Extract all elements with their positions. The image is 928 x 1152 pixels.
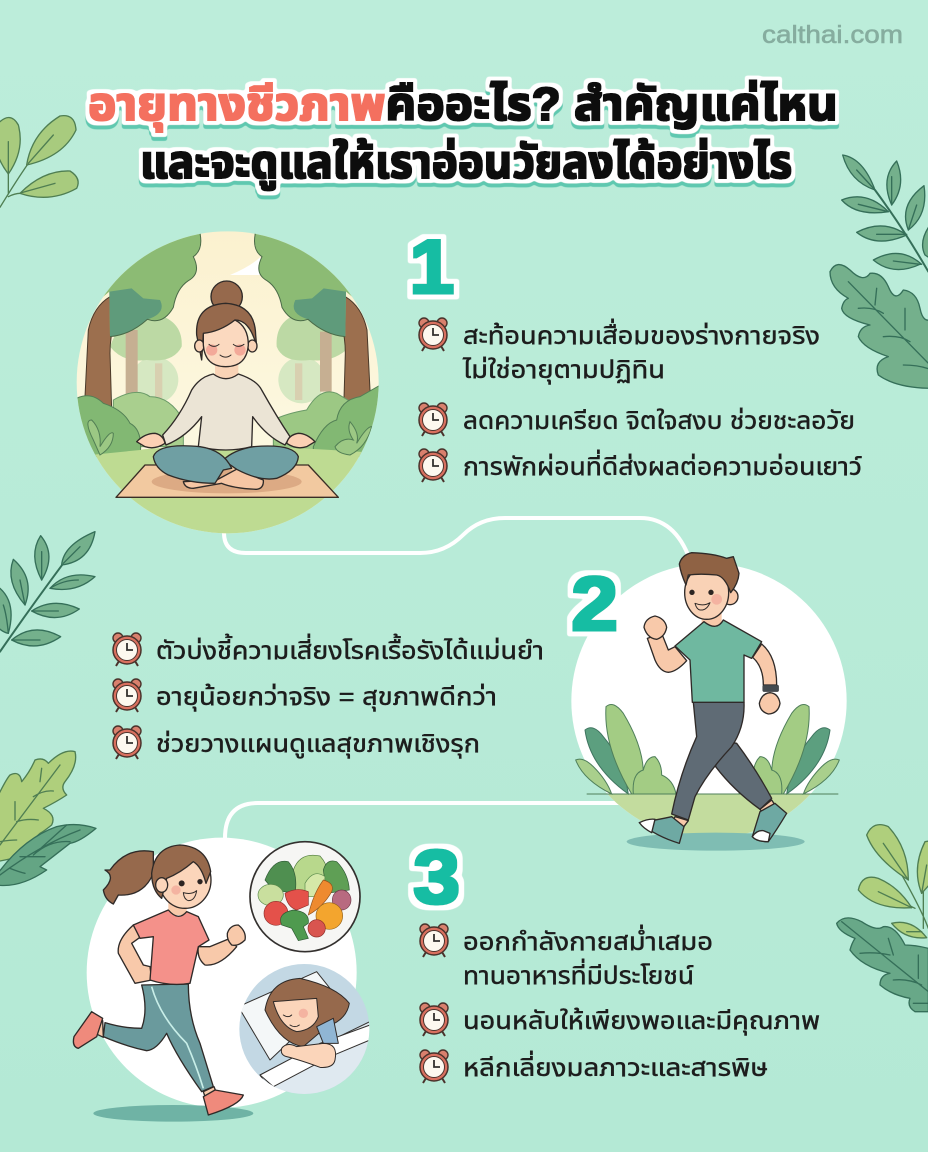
title: และจะดูแลให้เราอ่อนวัยลงได้อย่างไร	[140, 136, 792, 190]
runner	[73, 845, 245, 1115]
bullets: step 3	[420, 924, 820, 1083]
bullets: step 2: ช่วยวางแผนดูแลสุขภาพเชิงรุก	[156, 730, 480, 759]
leaves: lower left oak leaves	[0, 751, 96, 886]
leaves: lower right branch and oak leaf	[837, 825, 928, 1012]
title	[88, 78, 838, 190]
connector: step 1 to step 2	[224, 518, 690, 560]
food plate	[250, 842, 360, 952]
illustration: meditating woman	[67, 227, 389, 540]
number 2: 2	[571, 562, 618, 647]
bullets: step 1: การพักผ่อนที่ดีส่งผลต่อความอ่อนเยาว์	[463, 449, 862, 481]
illustration: walking man	[571, 553, 847, 861]
number 1: 1	[409, 224, 455, 309]
leaves: middle left branch	[0, 532, 95, 652]
bullets: step 1: ลดความเครียด จิตใจสงบ ช่วยชะลอวัย	[463, 407, 855, 435]
bullets: step 3: ออกกำลังกายสม่ำเสมอ	[463, 924, 713, 956]
bullets: step 2: ตัวบ่งชี้ความเสี่ยงโรคเรื้อรังได้แม่นยำ	[156, 633, 544, 665]
title: อายุทางชีวภาพ คืออะไร? สำคัญแค่ไหน	[88, 78, 838, 132]
bullets: step 2	[113, 633, 544, 759]
number 3: 3	[413, 835, 460, 920]
bullets: step 3: นอนหลับให้เพียงพอและมีคุณภาพ	[463, 1007, 820, 1036]
bullets: step 1	[419, 318, 862, 482]
bullets: step 2: อายุน้อยกว่าจริง = สุขภาพดีกว่า	[156, 683, 497, 712]
leaves: top right branch and oak leaf	[830, 155, 928, 388]
brand label: calthai.com	[762, 21, 903, 49]
bullets: step 1: ไม่ใช่อายุตามปฏิทิน	[462, 356, 665, 385]
bullets: step 3: ทานอาหารที่มีประโยชน์	[463, 958, 694, 990]
bullets: step 3: หลีกเลี่ยงมลภาวะและสารพิษ	[463, 1050, 768, 1082]
sleeping person	[238, 964, 373, 1097]
leaves: top left branch	[0, 116, 78, 207]
bullets: step 1: สะท้อนความเสื่อมของร่างกายจริง	[463, 318, 820, 350]
connector: step 2 to step 3	[225, 803, 620, 838]
illustration: running woman, food plate, sleeping	[73, 838, 373, 1122]
